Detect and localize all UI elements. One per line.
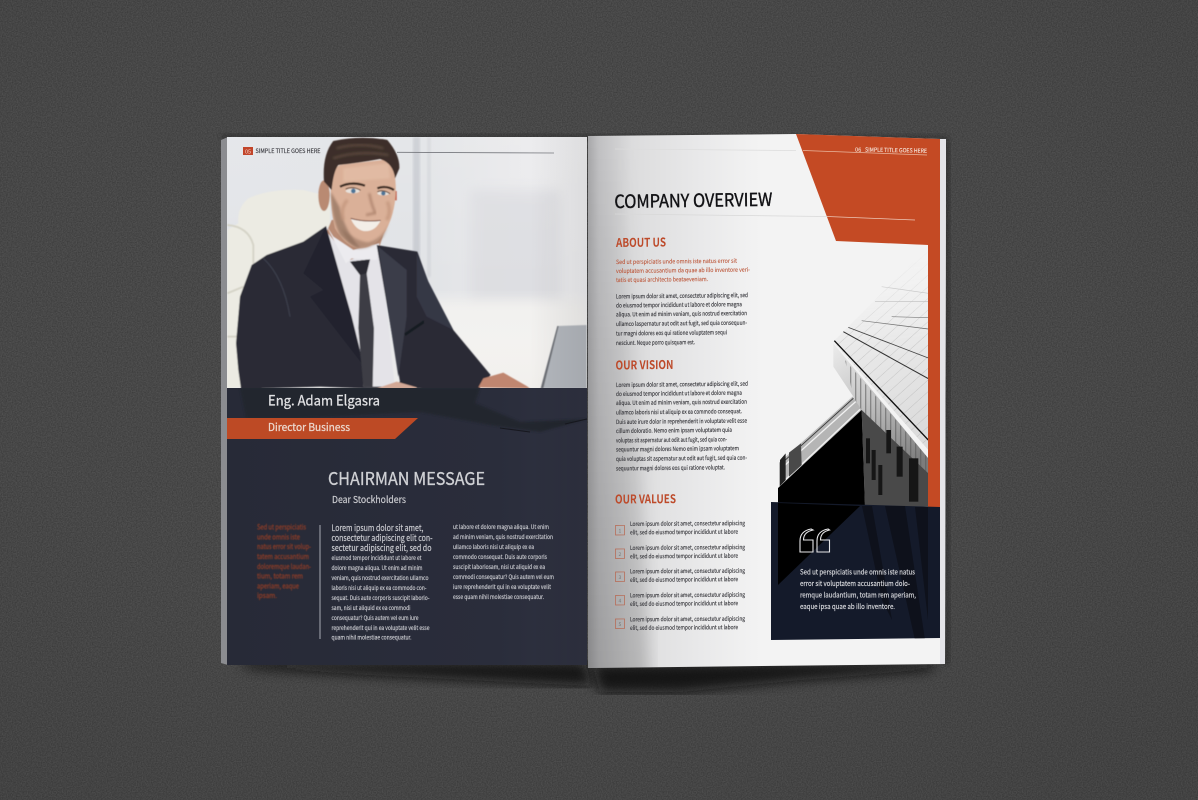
column divider [319, 525, 321, 639]
red side note: natus error sit volup- [257, 542, 311, 552]
chairman heading: Dear Stockholders [332, 492, 407, 506]
header rule and running title [615, 146, 927, 155]
running header [243, 147, 554, 156]
message column one: laboris nisi ut aliquip ex ea commodo con- [332, 584, 427, 592]
our vision section: quia voluptas sit aspernatur aut odit aut fugit, sed quia con- [616, 453, 747, 463]
about us section: do eiusmod tempor incididunt ut labore et dolore magna [616, 299, 742, 309]
chair [227, 190, 330, 388]
header rule and running title: SIMPLE TITLE GOES HERE [865, 146, 927, 155]
tie [350, 259, 374, 387]
message column two: iure reprehenderit qui in ea voluptate velit [453, 583, 552, 591]
message column one: sequat. Duis aute corporis suscipit laborio- [332, 594, 430, 602]
value item 2: Lorem ipsum dolor sit amet, consectetur adipiscing [630, 542, 746, 552]
our vision section: OUR VISION [615, 356, 673, 374]
message column one: consectetur adipiscing elit con- [332, 532, 433, 544]
red side note: aperiam, eaque [257, 582, 299, 592]
laptop [541, 325, 587, 388]
value item 4: Lorem ipsum dolor sit amet, consectetur adipiscing [630, 590, 746, 599]
value item 1: 1 [618, 527, 621, 534]
message column one: dolore magna aliqua. Ut enim ad minim [332, 564, 422, 572]
portrait photo [227, 137, 587, 388]
our vision section: Duis aute irure dolor in reprehenderit in voluptate velit esse [616, 416, 747, 426]
value item 1: Lorem ipsum dolor sit amet, consectetur adipiscing [630, 518, 746, 528]
value item 4: 4 [618, 597, 621, 604]
value item 1 [616, 518, 746, 537]
our vision section: aliqua. Ut enim ad minim veniam, quis nostrud exercitation [616, 397, 747, 407]
about us section: nesciunt. Neque porro quisquam est. [616, 337, 695, 347]
our vision section: Lorem ipsum dolor sit amet, consectetur adipiscing elit, sed [616, 379, 748, 389]
our vision section: ullamco laboris nisi ut aliquip ex ea commodo consequat. [616, 406, 742, 416]
message column two [453, 523, 554, 601]
quote text: eaque ipsa quae ab illo inventore. [800, 602, 895, 612]
message column one: eiusmod tempor incididunt ut labore et [332, 554, 422, 562]
navy quote panel [771, 502, 940, 640]
black tower block [778, 410, 865, 507]
value item 4: elit, sed do eiusmod tempor incididunt ut labore [630, 598, 738, 608]
value item 3: Lorem ipsum dolor sit amet, consectetur adipiscing [630, 566, 746, 575]
roof edge [779, 396, 862, 487]
facade [834, 267, 928, 450]
about us section: Lorem ipsum dolor sit amet, consectetur adipiscing elit, sed [616, 290, 748, 300]
suit jacket [236, 226, 492, 388]
red side note: Sed ut perspiciatis [257, 522, 307, 532]
chairman heading [328, 465, 485, 506]
red side note [257, 522, 311, 601]
message column two: suscipit laboriosam, nisi ut aliquid ex ea [453, 563, 545, 571]
value item 3: 3 [618, 574, 621, 581]
chairman heading: CHAIRMAN MESSAGE [328, 465, 485, 491]
message column one: reprehenderit qui in ea voluptate velit esse [332, 624, 430, 632]
value item 3 [616, 566, 746, 584]
red side note: tatem accusantium [257, 552, 309, 562]
book shadow [222, 134, 950, 692]
message column two: ullamco laboris nisi ut aliquip ex ea [453, 543, 534, 551]
right page [588, 134, 946, 668]
hands [478, 373, 530, 388]
spine shading [588, 238, 656, 668]
header rule and running title: 06 [855, 146, 861, 154]
value item 2: 2 [618, 551, 621, 558]
running header: SIMPLE TITLE GOES HERE [256, 147, 320, 155]
title rule [615, 214, 827, 216]
about us section: voluptatem accusantium da quae ab illo inventore veri- [616, 265, 750, 275]
message column two: esse quam nihil molestiae consequatur. [453, 593, 544, 601]
suit shadow on panel [240, 388, 587, 432]
red side note: tium, totam rem [257, 572, 303, 582]
value item 1: elit, sed do eiusmod tempor incididunt ut labore [630, 527, 738, 536]
quote text: Sed ut perspiciatis unde omnis iste natus [800, 568, 916, 578]
page sheet [588, 134, 946, 668]
message column one: sectetur adipiscing elit, sed do [332, 542, 432, 554]
about us section: ABOUT US [615, 233, 666, 251]
value item 4 [616, 590, 746, 608]
message column one: veniam, quis nostrud exercitation ullamco [332, 574, 429, 582]
page edge strip [221, 137, 228, 665]
about us section: Sed ut perspiciatis unde omnis iste natus error sit [616, 256, 738, 266]
floor lines [834, 327, 928, 440]
value item 2 [616, 542, 746, 561]
message column one: sam, nisi ut aliquid ex ea commodi [332, 604, 411, 612]
our vision section: cillum doloratio. Nemo enim ipsam voluptatem quia [616, 425, 732, 435]
head [318, 138, 399, 249]
quote text [800, 568, 916, 612]
dark panel [227, 388, 587, 665]
about us section: tatis et quasi architecto beataeveniam. [616, 274, 708, 284]
quote text: remque laudantium, totam rem aperiam, [800, 590, 916, 600]
building overlap white gap [771, 486, 778, 502]
message column one: consequatur? Quis autem vel eum iure [332, 614, 418, 622]
message column two: commodo consequat. Duis aute corporis [453, 553, 547, 561]
dark tower face [862, 410, 928, 507]
our vision section: voluptas sit aspernatur aut odit aut fugit, sed quia con- [616, 434, 727, 444]
message column one: quam nihil molestiae consequatur. [332, 634, 412, 642]
value item 2: elit, sed do eiusmod tempor incididunt ut labore [630, 551, 738, 560]
our values section: OUR VALUES [615, 490, 676, 508]
message column two: commodi consequatur? Quis autem vel eum [453, 573, 554, 581]
left page [221, 137, 588, 665]
our vision section: sequuntur magni dolores Nemo enim ipsam voluptatem [616, 443, 739, 453]
message column one: Lorem ipsum dolor sit amet, [332, 522, 424, 534]
about us section: ullamco laspernatur aut odit aut fugit, sed quia consequun- [616, 318, 747, 328]
red side note: ipsam. [257, 591, 277, 601]
job title banner [227, 418, 418, 439]
value item 5: elit, sed do eiusmod tempor incididunt ut labore [630, 622, 738, 632]
message column two: ut labore et dolore magna aliqua. Ut enim [453, 523, 549, 531]
our vision section: sequuntur magni dolores eos qui ratione voluptat. [616, 462, 725, 472]
collar [328, 228, 380, 260]
value item 5: 5 [618, 621, 621, 628]
page edge highlight [940, 139, 946, 664]
name: Eng. Adam Elgasra [268, 390, 380, 410]
shirt [326, 227, 395, 388]
about us section: aliqua. Ut enim ad minim veniam, quis nostrud exercitation [616, 308, 747, 318]
company overview title: COMPANY OVERVIEW [614, 186, 773, 214]
message column one [332, 522, 433, 642]
value item 3: elit, sed do eiusmod tempor incididunt ut labore [630, 574, 738, 584]
window strip [834, 345, 928, 473]
our vision section: do eiusmod tempor incididunt ut labore et dolore magna [616, 388, 742, 398]
message column two: ad minim veniam, quis nostrud exercitation [453, 533, 553, 541]
about us section: tur magni dolores eos qui ratione voluptatem sequi [616, 327, 727, 337]
our vision section [615, 355, 748, 473]
icon: quotation marks [800, 529, 830, 552]
skyscraper photo [778, 243, 928, 507]
red side note: doloremque laudan- [257, 562, 311, 572]
job title banner: Director Business [268, 420, 350, 435]
orange block [796, 134, 940, 507]
value item 5: Lorem ipsum dolor sit amet, consectetur adipiscing [630, 614, 746, 623]
value item 5 [616, 614, 746, 632]
red side note: unde omnis iste [257, 532, 300, 542]
neck [326, 219, 384, 260]
running header: 05 [245, 148, 251, 156]
our values section [615, 490, 746, 632]
spine shade [530, 137, 588, 665]
quote text: error sit voluptatem accusantium dolo- [800, 579, 910, 589]
about us section [615, 233, 750, 347]
